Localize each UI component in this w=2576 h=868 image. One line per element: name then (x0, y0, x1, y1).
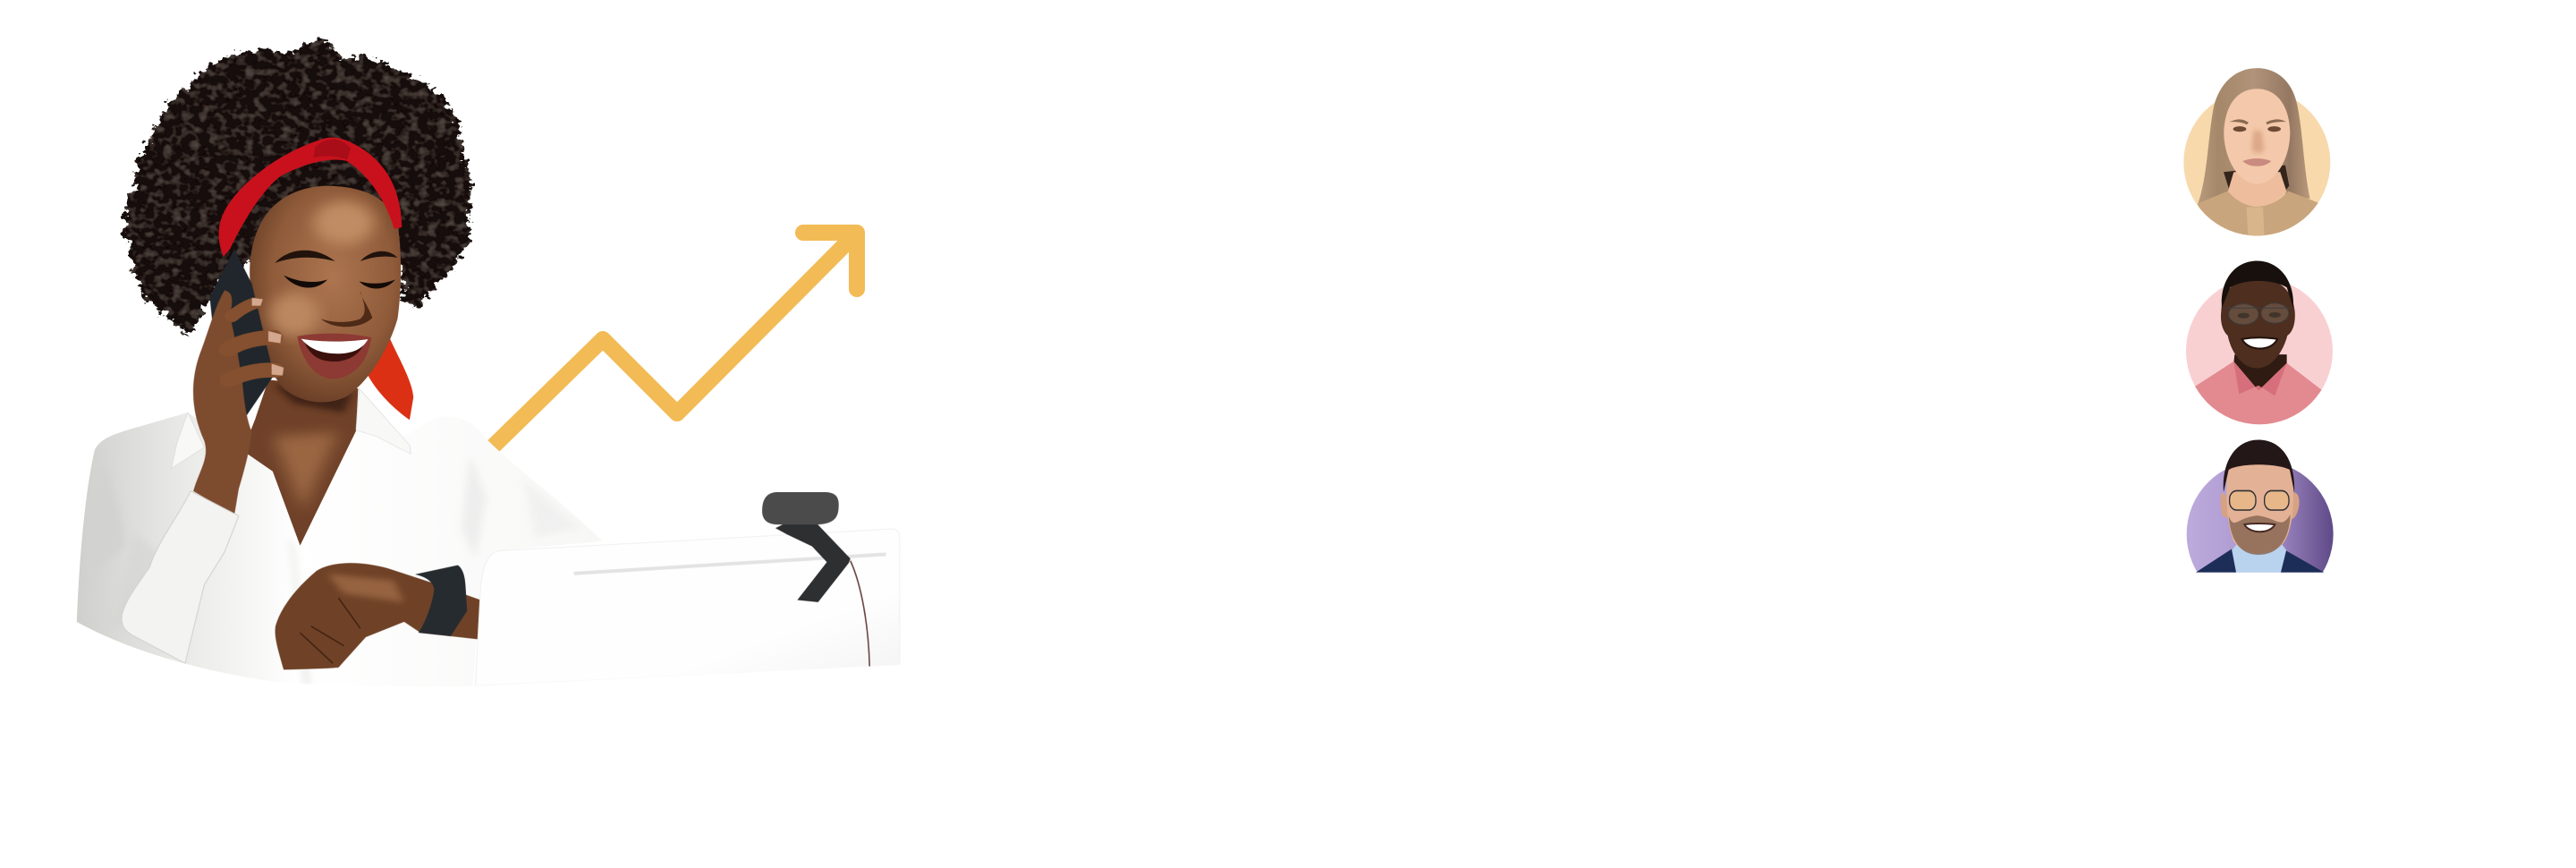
headband knot (313, 140, 351, 159)
smile (2244, 523, 2275, 532)
shirt cuff (122, 491, 239, 663)
beard (2229, 515, 2291, 555)
forehead shine (314, 201, 374, 244)
shirt (2194, 362, 2323, 427)
facial features (275, 251, 397, 379)
jacket (2196, 549, 2324, 573)
blouse (2198, 191, 2319, 237)
glasses (2224, 303, 2292, 325)
avatar: man with round glasses and pink shirt (2186, 261, 2333, 427)
hair (2224, 440, 2294, 492)
phone (209, 249, 274, 419)
face (2226, 461, 2293, 553)
headband (219, 138, 402, 257)
neck shadow (273, 384, 352, 413)
arrow: rising trend (487, 233, 857, 452)
collars (172, 388, 411, 468)
facial features (2230, 119, 2286, 166)
hair (2222, 261, 2293, 308)
neck (2228, 172, 2287, 207)
glasses (2230, 490, 2289, 510)
forearm and hand on watch (275, 563, 481, 670)
neck (2233, 354, 2287, 391)
illustration canvas (77, 38, 2334, 685)
background circle (2186, 468, 2334, 573)
chest highlight (273, 432, 338, 511)
avatar: woman with long blond hair (2183, 68, 2330, 237)
webcam (762, 492, 869, 667)
face (2224, 89, 2290, 184)
avatar: man with dark glasses and navy jacket (2186, 440, 2334, 573)
cheek shine (270, 293, 319, 336)
shirt body (77, 413, 602, 687)
neck (240, 379, 358, 548)
hair (124, 39, 471, 334)
face (2221, 278, 2295, 369)
background circle (2183, 89, 2330, 235)
scarf tail (369, 338, 413, 421)
photo: woman on phone at monitor (77, 39, 900, 687)
face (250, 186, 401, 402)
hand holding phone (193, 291, 284, 515)
hair (2198, 68, 2310, 204)
monitor (475, 529, 900, 686)
shirt folds (148, 467, 485, 684)
background circle (2186, 277, 2333, 424)
monitor edge bar (574, 552, 886, 575)
smile (2242, 337, 2277, 349)
smart watch (415, 566, 467, 636)
ears (2220, 492, 2300, 520)
eyes (2238, 312, 2281, 319)
neck and shirt (2232, 537, 2286, 573)
